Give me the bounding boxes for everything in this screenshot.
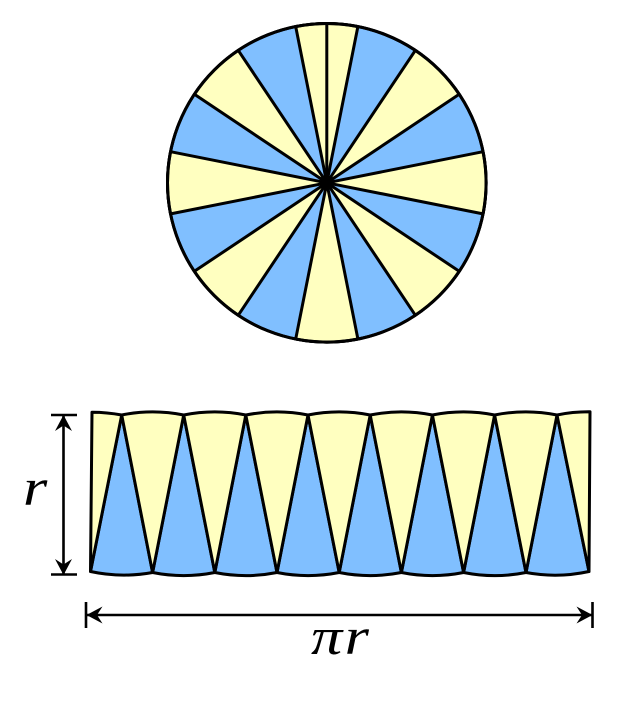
blue sectors pointing up	[90, 415, 589, 576]
dimension arrow: width pi r	[86, 602, 592, 628]
circle divided into sectors	[167, 24, 486, 342]
label: r: r	[23, 460, 48, 517]
dimension arrow: height r	[51, 415, 77, 575]
rearranged sectors strip	[90, 412, 590, 576]
yellow sectors pointing down	[90, 412, 590, 572]
label: pi r: πr	[311, 609, 370, 666]
